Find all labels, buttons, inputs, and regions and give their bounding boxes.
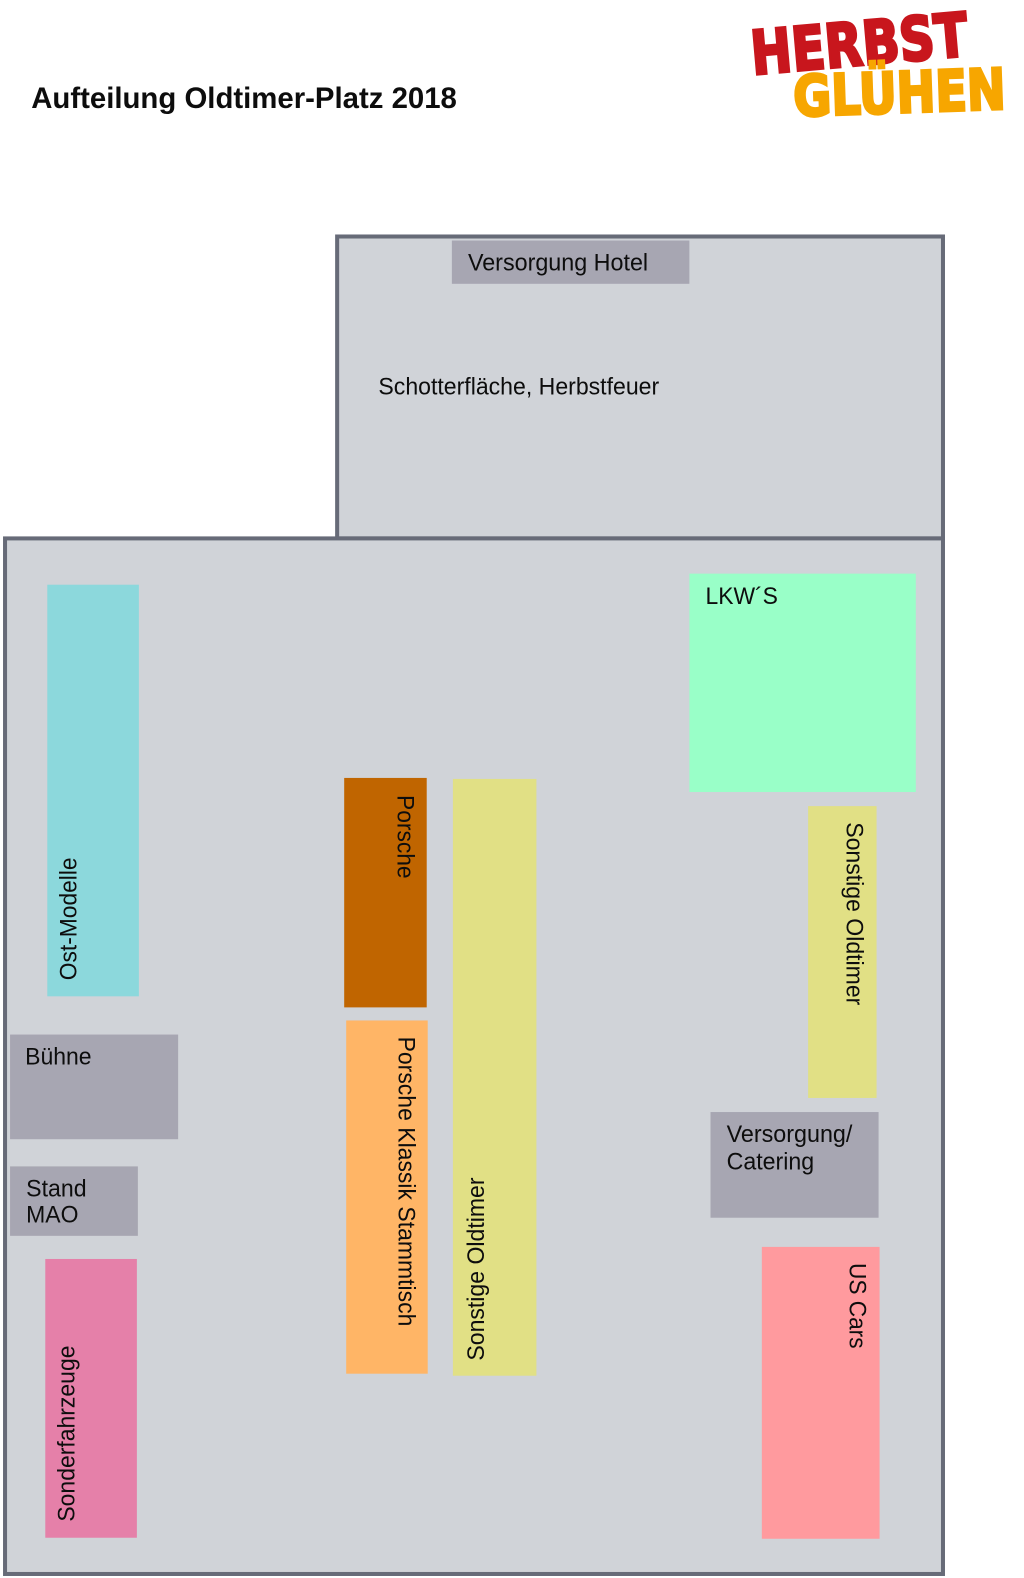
- zone: Sonderfahrzeuge: [45, 1259, 137, 1538]
- zone: LKW'S: LKW´S: [705, 583, 778, 610]
- zone: Versorgung Hotel: [452, 241, 689, 284]
- zone: Versorgung/Catering: Catering: [727, 1148, 814, 1175]
- zone: Sonstige Oldtimer right: Sonstige Oldtimer: [840, 822, 867, 1005]
- zone: Porsche: [344, 778, 427, 1007]
- logo: Herbstglühen: [748, 1, 1007, 130]
- zone: Versorgung/Catering: [711, 1112, 879, 1218]
- zone: US Cars: [762, 1247, 880, 1539]
- zone: Ost-Modelle: [47, 585, 139, 996]
- panel: Schotterfläche area: [337, 236, 943, 538]
- zone: Stand MAO: Stand: [26, 1176, 87, 1203]
- zone: Porsche Klassik Stammtisch: [346, 1020, 428, 1374]
- panel: main square: [5, 538, 943, 1574]
- zone: Sonstige Oldtimer centre: [453, 779, 536, 1376]
- zone: US Cars: US Cars: [843, 1263, 870, 1349]
- zone: Sonderfahrzeuge: Sonderfahrzeuge: [53, 1346, 80, 1522]
- zone: Versorgung/Catering: Versorgung/: [727, 1121, 853, 1148]
- zone: Stand MAO: MAO: [26, 1202, 79, 1229]
- zone: Ost-Modelle: Ost-Modelle: [55, 857, 82, 980]
- zone: LKW'S: [689, 574, 916, 792]
- zone: Bühne: Bühne: [25, 1044, 92, 1071]
- title: Aufteilung Oldtimer-Platz 2018: [31, 82, 457, 115]
- zone: Porsche Klassik Stammtisch: Porsche Klassik Stammtisch: [393, 1037, 420, 1326]
- label: Schotterfläche, Herbstfeuer: Schotterfläche, Herbstfeuer: [378, 373, 659, 400]
- zone: Sonstige Oldtimer right: [808, 806, 877, 1098]
- zone: Bühne: [10, 1035, 178, 1139]
- zone: Versorgung Hotel: Versorgung Hotel: [468, 250, 648, 277]
- zone: Porsche: Porsche: [392, 795, 419, 879]
- zone: Stand MAO: [10, 1166, 138, 1236]
- zone: Sonstige Oldtimer centre: Sonstige Oldtimer: [463, 1177, 490, 1361]
